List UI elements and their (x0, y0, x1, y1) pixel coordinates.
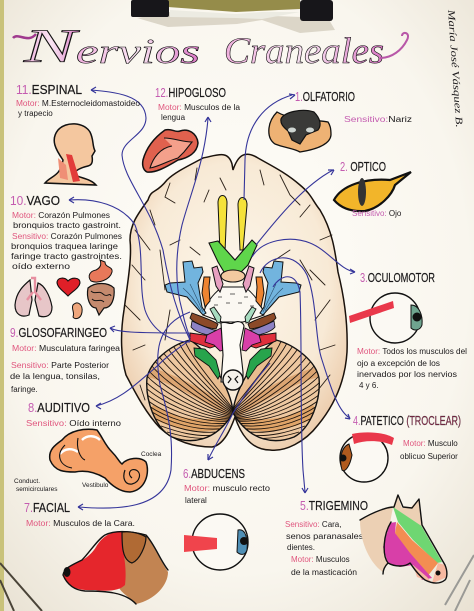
arrow: 10 vago (69, 200, 190, 342)
text: espinal motor: Motor: M.Esternocleidomastoideo (16, 99, 141, 108)
icon: tongue (143, 130, 198, 172)
text block: trigemino: Motor: Musculos (291, 555, 350, 564)
text block: glosofaringeo sensitivo: de la lengua, tonsilas, (10, 372, 100, 381)
text block: trigemino: dientes. (287, 543, 315, 552)
text block: glosofaringeo sensitivo (10, 361, 109, 394)
heading: 8 auditivo: 8.AUDITIVO (28, 400, 90, 415)
icon: cat eye (334, 172, 411, 211)
heading: 7 facial: 7.FACIAL (24, 500, 70, 515)
cerebellum outline (147, 340, 319, 441)
label: conducto semicirculares: semicirculares (16, 486, 58, 493)
icon: eye with upper band (340, 432, 394, 482)
text block: trigemino: senos paranasales, (286, 532, 366, 541)
medulla (221, 322, 244, 382)
arrow: 5 trigemino (273, 277, 305, 492)
text block: glosofaringeo sensitivo: Sensitivo: Parte Posterior (11, 361, 109, 370)
icon: horse head (360, 495, 447, 583)
clipboard wires, bottom right (445, 555, 474, 611)
heading: 3 oculomotor: 3.OCULOMOTOR (360, 270, 435, 285)
text block: oculomotor: ojo a excepción de los (357, 359, 440, 368)
text block: glosofaringeo sensitivo: faringe. (11, 385, 38, 394)
text block: trigemino: de la masticación (291, 568, 357, 577)
text block: vago: Sensitivo: Corazón Pulmones (12, 232, 122, 241)
cerebellum left (140, 335, 235, 445)
clipboard clip (131, 0, 335, 33)
arrow: 4 patetico (260, 258, 350, 418)
text: auditivo sensitivo: Sensitivo: Oído interno (26, 419, 122, 428)
icon: eye with lateral band (184, 514, 248, 570)
text: hipogloso motor: Motor: Musculos de la (158, 103, 241, 112)
cranial nerves, left side (165, 261, 224, 379)
olfactory nerves (218, 196, 247, 252)
text block: trigemino: Sensitivo: Cara, (285, 520, 341, 529)
text: patetico motor: Motor: Musculo (403, 439, 458, 448)
clipboard wires, bottom left (0, 563, 42, 611)
arrowheads (69, 87, 355, 510)
text: espinal trapecio: y trapecio (18, 109, 53, 118)
icon: head and neck (45, 124, 96, 185)
brain outline (122, 154, 347, 450)
pituitary (221, 270, 245, 282)
signature: María José Vásquez B. (445, 8, 464, 128)
icon: heart (57, 278, 80, 296)
cerebral sulci (125, 168, 335, 440)
heading: 1 olfatorio: 1.OLFATORIO (295, 89, 355, 104)
icon: inner ear (50, 429, 147, 492)
heading: 2 optico: 2. OPTICO (340, 159, 386, 174)
heading: 5 trigemino: 5.TRIGEMINO (300, 498, 368, 513)
cranial nerves, right side (242, 261, 301, 379)
text block: oculomotor (357, 347, 467, 390)
text: abducens motor: Motor: musculo recto (184, 484, 271, 493)
text block: oculomotor: Motor: Todos los musculos del (357, 347, 467, 356)
text block: oculomotor: inervados por los nervios (357, 370, 457, 379)
icon: small ear (72, 303, 82, 319)
title: Craneales (224, 31, 384, 72)
text: facial motor: Motor: Musculos de la Cara. (26, 519, 135, 528)
arrow: 11 espinal (91, 90, 190, 340)
icon: dog head (63, 531, 168, 604)
heading: 12 hipogloso: 12.HIPOGLOSO (155, 85, 226, 100)
arrow: 3 oculomotor (252, 239, 355, 272)
label: coclea: Coclea (141, 451, 162, 458)
title: ervios (76, 32, 200, 71)
text: abducens lateral: lateral (185, 496, 207, 505)
icon: eye with muscle band (349, 293, 422, 343)
text: olfatorio sensitivo: Sensitivo: Nariz (344, 115, 412, 124)
label: vestibulo: Vestibulo (82, 482, 109, 489)
text block: vago: Motor: Corazón Pulmones (12, 211, 110, 220)
text block: vago: bronquios tracto gastroint. (13, 221, 121, 230)
icon: dog nose (269, 110, 331, 152)
text block: trigemino (285, 520, 366, 577)
heading: 9 glosofaringeo: 9.GLOSOFARINGEO (10, 325, 107, 340)
spinal cord (223, 370, 243, 390)
label: conducto semicirculares: Conduct. (14, 478, 40, 485)
heading: 11 espinal: 11.ESPINAL (16, 82, 82, 97)
arrow: 6 abducens (208, 363, 270, 460)
clipboard edge (0, 0, 4, 611)
cerebellum right (231, 335, 326, 445)
arrow: 2 optico (256, 170, 333, 245)
arrow: 9 glosofaringeo (110, 328, 190, 333)
arrow: 7 facial (79, 312, 190, 508)
arrow: 8 auditivo (96, 340, 190, 406)
optic chiasm (209, 240, 257, 272)
text block: vago: oído externo (12, 262, 71, 271)
icon: stomach (89, 260, 112, 282)
title (13, 20, 408, 73)
text block: oculomotor: 4 y 6. (359, 381, 379, 390)
pons (203, 287, 264, 322)
arrow: 12 hipogloso (177, 118, 208, 338)
text: hipogloso lengua: lengua (161, 113, 186, 122)
title: N (22, 20, 81, 73)
text: glosofaringeo motor: Motor: Musculatura faringea (12, 344, 121, 353)
panel: brain (122, 154, 347, 450)
text: patetico oblicuo: oblicuo Superior (400, 452, 458, 461)
heading: 10 vago: 10.VAGO (10, 193, 60, 208)
text block: vago: faringe tracto gastrointes. (11, 252, 122, 261)
arrow: 1 olfatorio (244, 95, 292, 200)
heading: 6 abducens: 6.ABDUCENS (183, 466, 245, 481)
icon: lungs (15, 278, 52, 317)
text block: vago (11, 211, 122, 271)
text block: vago: bronquios traquea laringe (11, 242, 119, 251)
text: optico sensitivo: Sensitivo: Ojo (352, 209, 402, 218)
icon: intestines (87, 284, 114, 315)
